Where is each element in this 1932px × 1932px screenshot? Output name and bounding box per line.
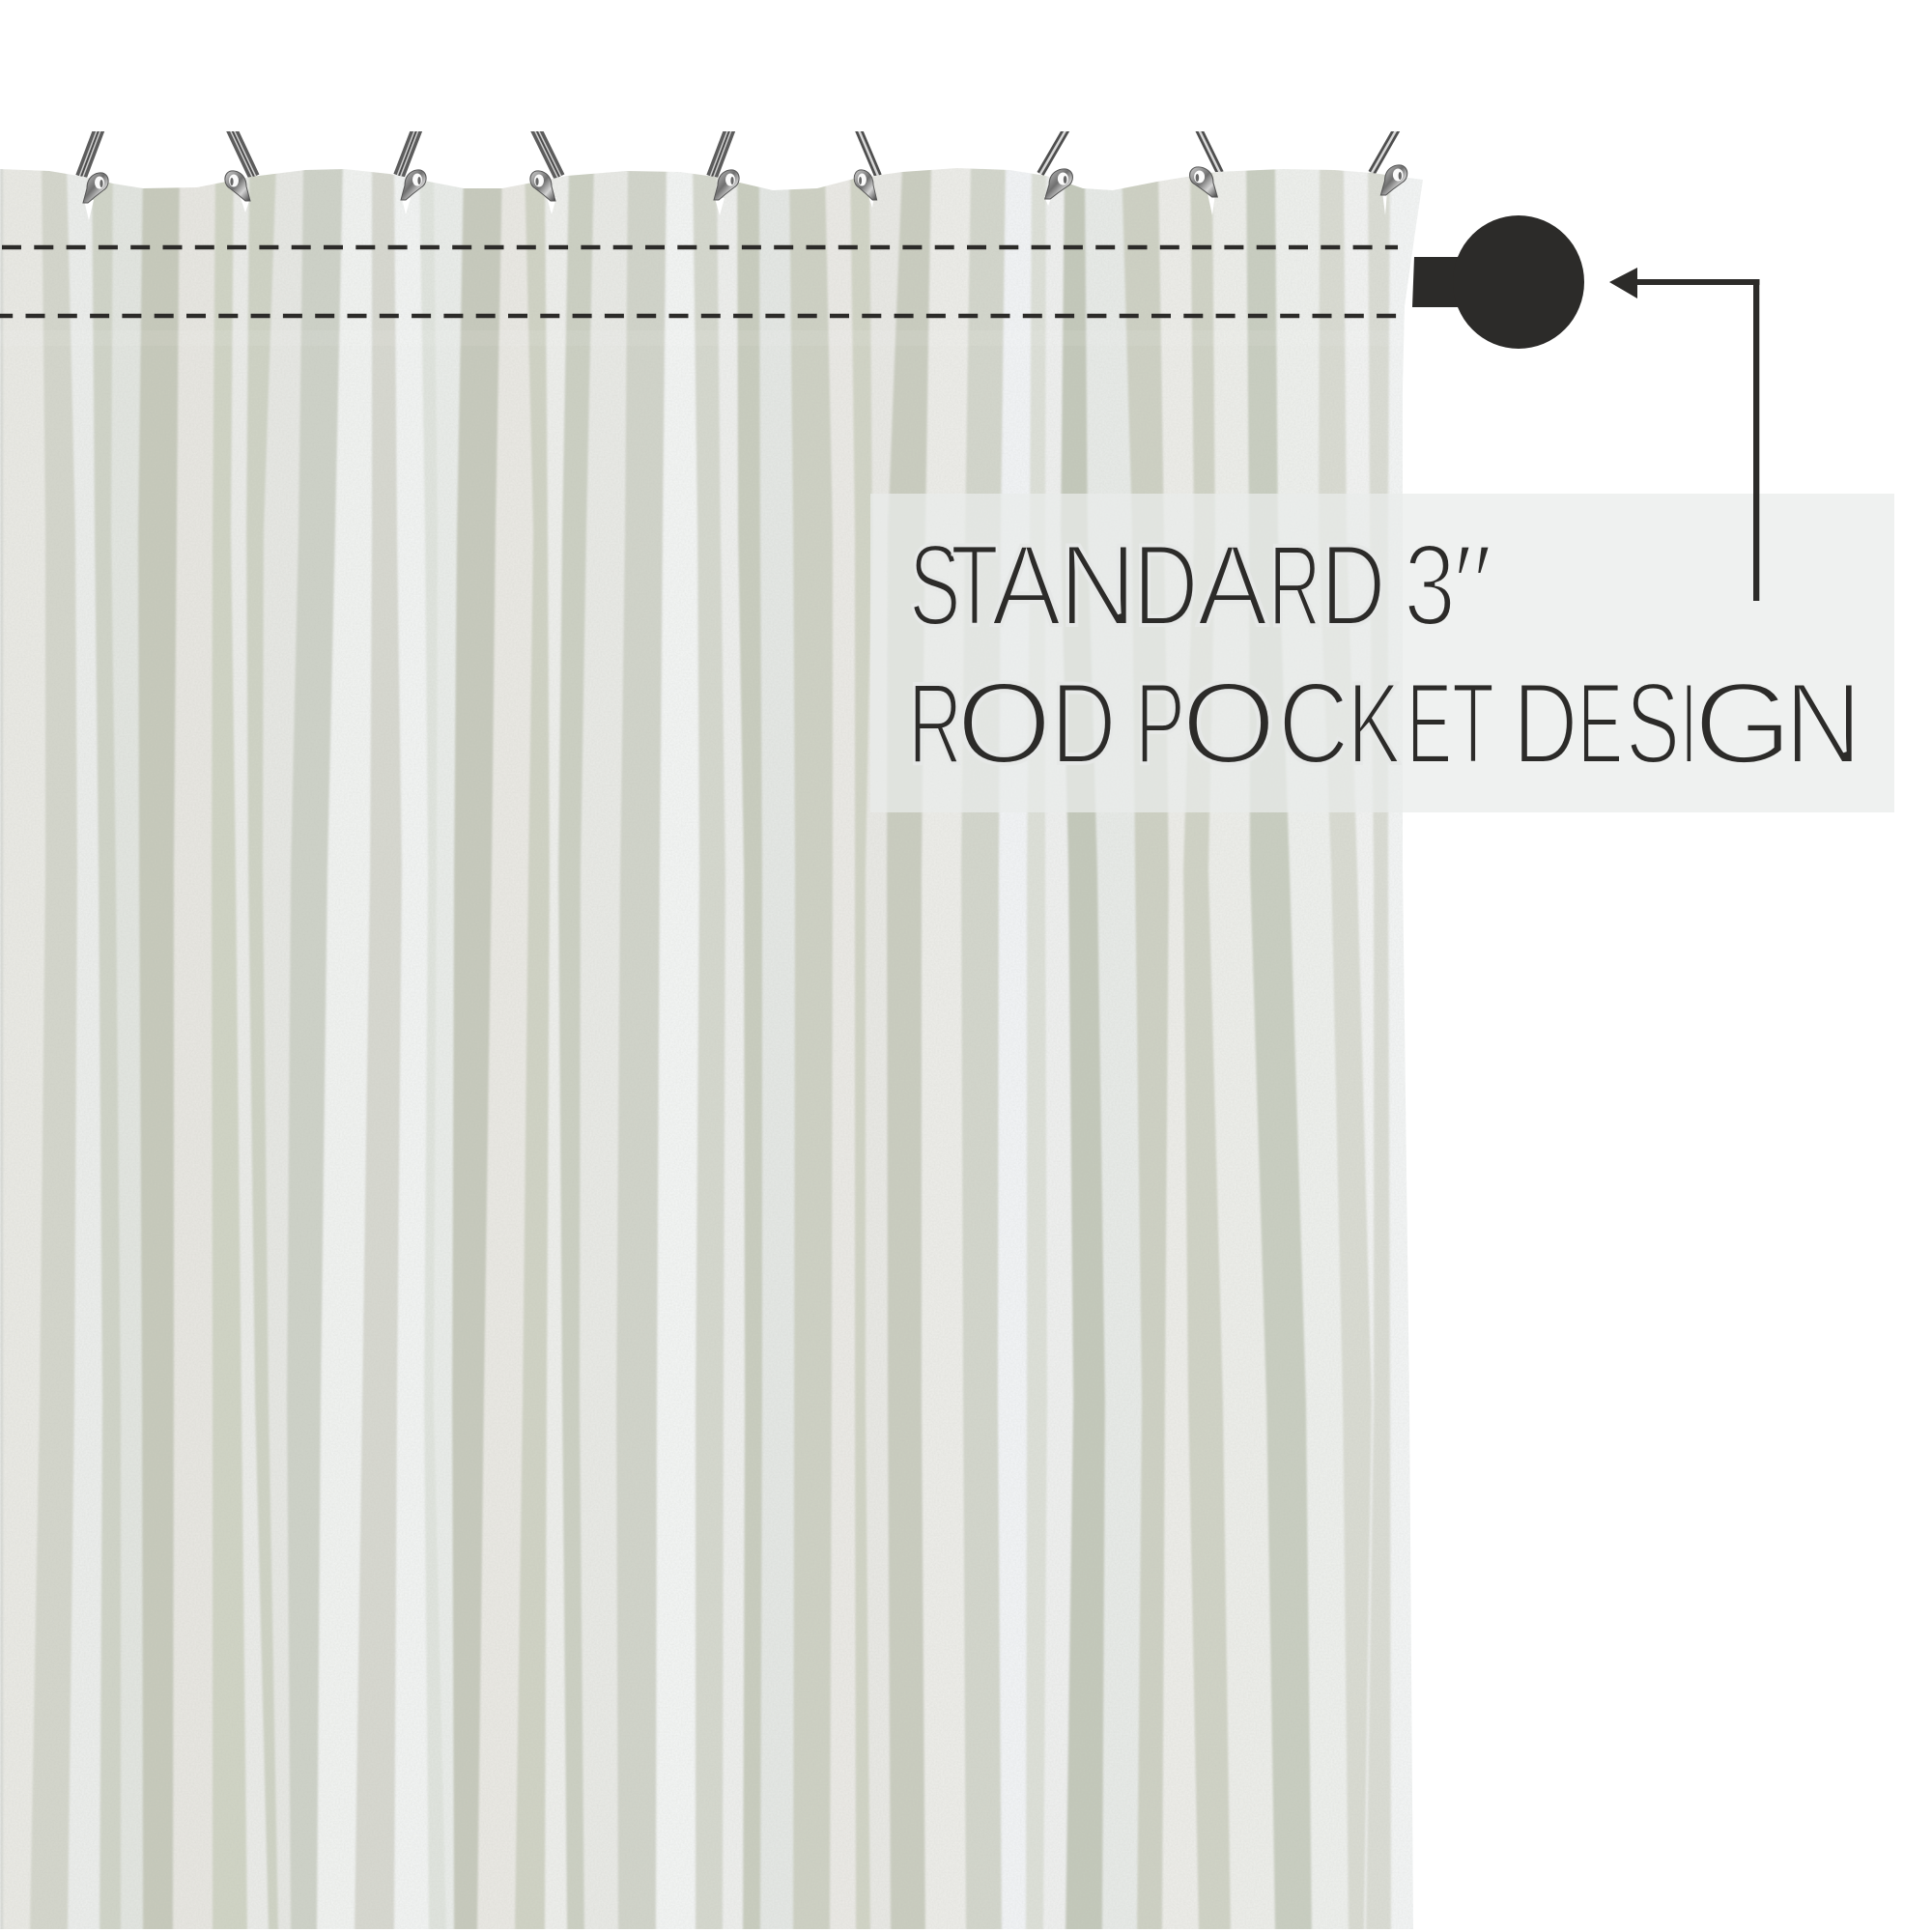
- text line: ROD POCKET DESIGN: R: [908, 659, 962, 788]
- text line: STANDARD 3": R: [1268, 521, 1321, 650]
- text line: ROD POCKET DESIGN: D: [1513, 659, 1577, 788]
- curtain hooks: wires above the fabric: [81, 126, 1399, 177]
- text line: ROD POCKET DESIGN: C: [1278, 659, 1350, 788]
- text line: STANDARD 3": A: [991, 521, 1062, 650]
- text line: ROD POCKET DESIGN: O: [1181, 659, 1276, 788]
- text line: STANDARD 3": D: [1133, 521, 1198, 650]
- text line: ROD POCKET DESIGN: T: [1452, 659, 1494, 788]
- text line: ROD POCKET DESIGN: E: [1406, 659, 1453, 788]
- text line: STANDARD 3": N: [1059, 521, 1137, 650]
- dashed line: bottom of rod pocket: [0, 314, 1398, 318]
- callout panel: [870, 494, 1894, 812]
- text line: ROD POCKET DESIGN: N: [1784, 659, 1862, 788]
- hook slits in the fabric: [84, 191, 1387, 220]
- text line: ROD POCKET DESIGN: G: [1693, 659, 1793, 788]
- sage stripes: [30, 164, 1391, 1932]
- chrome hook beads: [83, 165, 1407, 203]
- text line: ROD POCKET DESIGN: E: [1577, 659, 1624, 788]
- text line: STANDARD 3": T: [951, 521, 999, 650]
- text line: ROD POCKET DESIGN: I: [1681, 659, 1697, 788]
- text line: ROD POCKET DESIGN: D: [1051, 659, 1117, 788]
- text line: STANDARD 3": S: [909, 521, 961, 650]
- text line: STANDARD 3": A: [1197, 521, 1268, 650]
- text line: STANDARD 3": ″: [1452, 521, 1492, 650]
- striped curtain panel: [0, 126, 1449, 1932]
- text line: STANDARD 3": [909, 521, 1492, 650]
- text line: ROD POCKET DESIGN: [908, 659, 1862, 788]
- text line: STANDARD 3": 3: [1404, 521, 1456, 650]
- icon: curtain rod end and round finial: [1412, 215, 1584, 349]
- dashed line: top of rod pocket: [2, 245, 1398, 249]
- text line: ROD POCKET DESIGN: P: [1135, 659, 1185, 788]
- text line: ROD POCKET DESIGN: O: [956, 659, 1052, 788]
- light bands between stripes: [317, 169, 1423, 1929]
- arrow pointing to the rod: [1609, 268, 1760, 601]
- text line: ROD POCKET DESIGN: K: [1348, 659, 1401, 788]
- callout text: [908, 521, 1862, 788]
- text line: ROD POCKET DESIGN: S: [1626, 659, 1680, 788]
- text line: STANDARD 3": D: [1321, 521, 1385, 650]
